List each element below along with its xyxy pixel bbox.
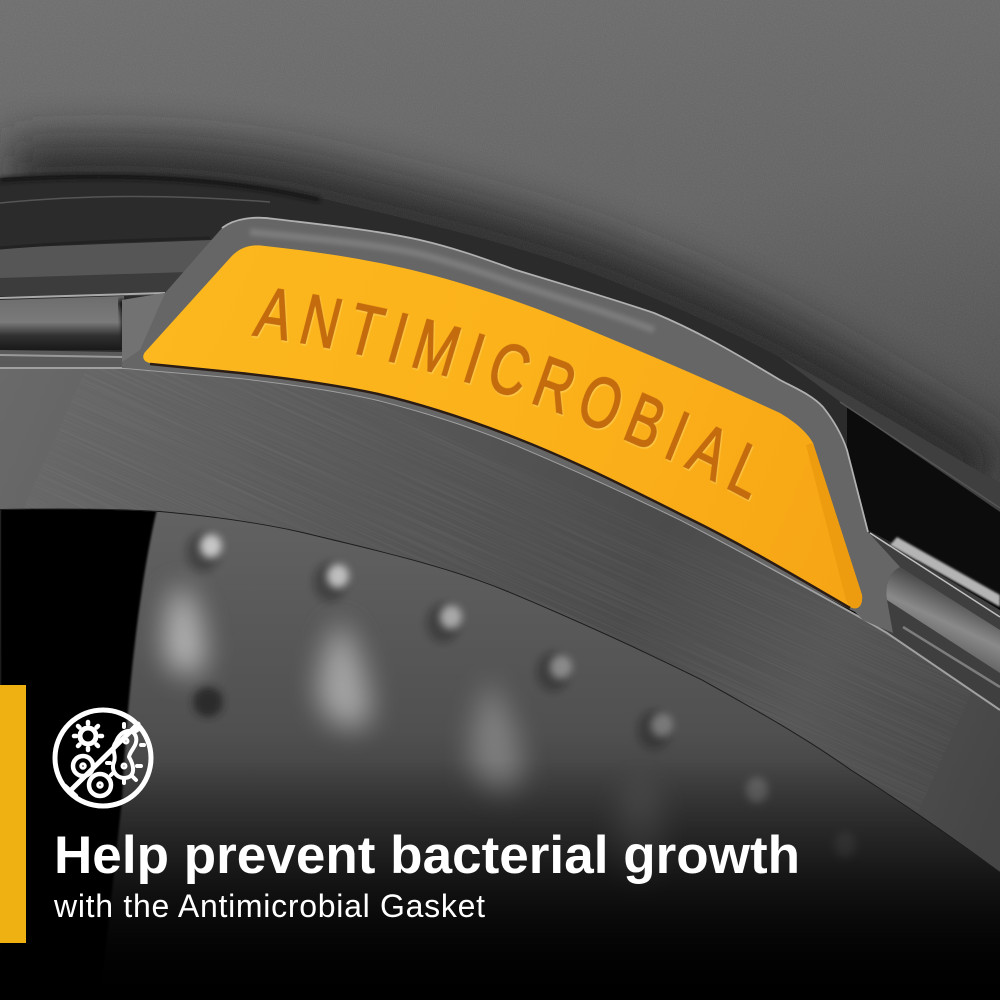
gear germ [74, 722, 102, 750]
panel: drum interior [0, 510, 1000, 924]
panel: dark groove around door opening [0, 177, 1000, 600]
embossed label text: ANTIMICROBIAL [251, 288, 754, 502]
yellow antimicrobial label [143, 245, 862, 609]
light streaks on drum wall [164, 585, 664, 880]
gasket frame around label [122, 218, 900, 633]
blurred drum holes [186, 532, 856, 858]
panel: textured gray washer front [0, 0, 1000, 560]
yellow accent bar [0, 685, 26, 943]
panel: silver strip and gasket rail right [860, 532, 1000, 730]
panel: gasket rail left [0, 293, 165, 368]
icon: crossed out bacteria and germs [55, 710, 151, 806]
looped microbes [65, 756, 111, 796]
heading: Help prevent bacterial growth [54, 826, 800, 885]
subheading: with the Antimicrobial Gasket [53, 888, 485, 924]
bacterium rod [107, 724, 144, 783]
panel: stainless door ring [0, 367, 1000, 873]
